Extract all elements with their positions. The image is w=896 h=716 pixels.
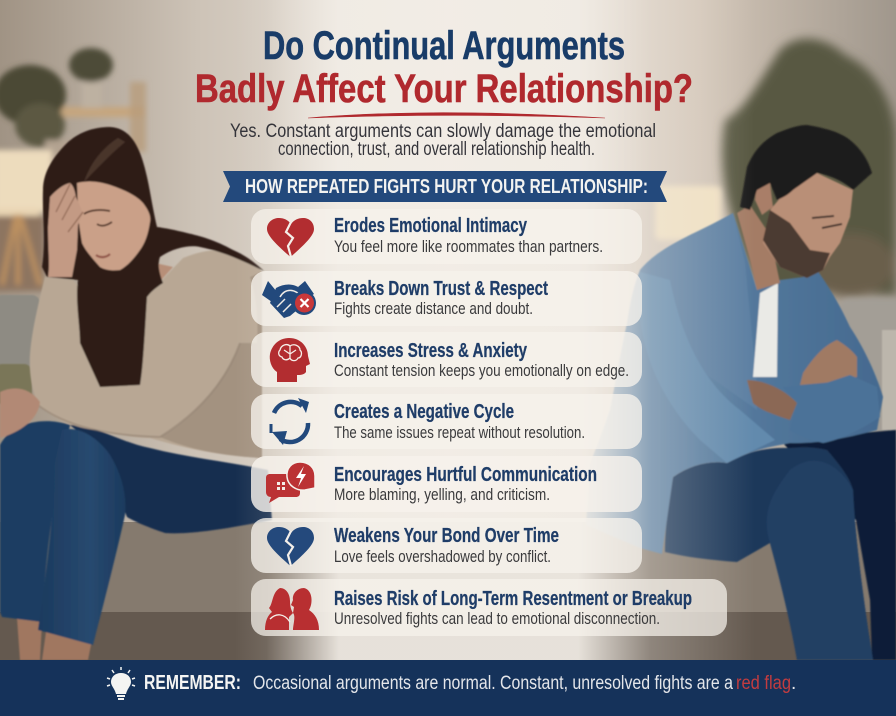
panel: encourages hurtful communication: Encourages Hurtful Communication xyxy=(334,464,597,486)
shirt xyxy=(586,213,883,554)
panel: weakens your bond xyxy=(251,518,642,573)
face xyxy=(763,173,853,278)
woman xyxy=(0,127,272,660)
panel: raises risk of resentment or breakup xyxy=(251,579,727,636)
icon: light bulb xyxy=(107,667,135,700)
feet xyxy=(17,618,92,660)
title: Badly Affect Your Relationship? xyxy=(195,67,693,111)
hair xyxy=(740,125,872,210)
panel: encourages hurtful communication xyxy=(251,456,642,512)
section banner xyxy=(223,171,667,202)
panel: breaks down trust and respect xyxy=(251,271,642,326)
panel: weakens your bond: Love feels overshadowed by conflict. xyxy=(334,548,551,566)
icon: cycle arrows xyxy=(271,398,309,445)
panel: creates a negative cycle: The same issues repeat without resolution. xyxy=(334,424,585,442)
panel: erodes emotional intimacy: Erodes Emotional Intimacy xyxy=(334,215,528,237)
footer bar: Occasional arguments are normal. Constant, unresolved fights are a xyxy=(253,673,733,694)
sweater xyxy=(30,250,262,458)
panel: breaks down trust and respect: Breaks Down Trust & Respect xyxy=(334,278,548,300)
icon: broken handshake xyxy=(262,281,316,318)
panel: increases stress and anxiety xyxy=(251,332,642,387)
footer bar: red flag xyxy=(736,673,791,694)
man xyxy=(586,125,896,660)
panel: erodes emotional intimacy xyxy=(251,209,642,264)
icon: arguing speech bubbles xyxy=(266,462,315,503)
panel: increases stress and anxiety: Constant tension keeps you emotionally on edge. xyxy=(334,362,629,380)
far leg jeans xyxy=(780,430,896,660)
footer bar: . xyxy=(791,673,796,694)
crossed arms xyxy=(747,380,797,420)
thigh and near leg jeans xyxy=(665,447,873,660)
panel: increases stress and anxiety: Increases Stress & Anxiety xyxy=(334,340,528,362)
section banner: HOW REPEATED FIGHTS HURT YOUR RELATIONSHIP: xyxy=(245,176,648,198)
subtitle xyxy=(230,121,656,160)
left shelf and plants xyxy=(0,48,146,165)
footer bar: REMEMBER: xyxy=(144,672,241,694)
title xyxy=(195,24,693,111)
beard xyxy=(763,210,830,278)
subtitle: Yes. Constant arguments can slowly damage the emotional xyxy=(230,121,656,142)
hand on forehead xyxy=(48,183,83,277)
panel: weakens your bond: Weakens Your Bond Over Time xyxy=(334,525,559,547)
panel: raises risk of resentment or breakup: Unresolved fights can lead to emotional disconnection. xyxy=(334,610,660,628)
near leg jeans xyxy=(0,421,70,622)
panel: creates a negative cycle xyxy=(251,394,642,449)
icon: couple silhouettes back to back xyxy=(265,588,319,630)
icon: broken heart red xyxy=(267,218,314,257)
t-shirt xyxy=(753,283,778,377)
thigh xyxy=(70,425,272,533)
far shin xyxy=(38,429,125,645)
footer bar xyxy=(0,660,896,716)
right plant and lamp xyxy=(655,39,896,297)
hair xyxy=(42,127,264,387)
resting hand xyxy=(0,388,40,438)
sofa xyxy=(0,295,896,660)
left lamp xyxy=(0,150,52,291)
panel: breaks down trust and respect: Fights create distance and doubt. xyxy=(334,300,533,318)
panel: creates a negative cycle: Creates a Negative Cycle xyxy=(334,401,514,423)
center light fade xyxy=(235,0,755,660)
panel: raises risk of resentment or breakup: Raises Risk of Long-Term Resentment or Breakup xyxy=(334,588,692,610)
icon: broken heart blue xyxy=(267,527,314,566)
neck xyxy=(128,258,173,300)
neck xyxy=(737,205,780,290)
ear xyxy=(755,183,773,215)
title: Do Continual Arguments xyxy=(263,24,625,68)
panel: encourages hurtful communication: More blaming, yelling, and criticism. xyxy=(334,486,550,504)
subtitle: connection, trust, and overall relationship health. xyxy=(278,139,595,160)
panel: erodes emotional intimacy: You feel more like roommates than partners. xyxy=(334,238,603,256)
icon: head with brain xyxy=(270,338,310,382)
title underline swoosh xyxy=(308,113,605,118)
face xyxy=(77,182,150,270)
